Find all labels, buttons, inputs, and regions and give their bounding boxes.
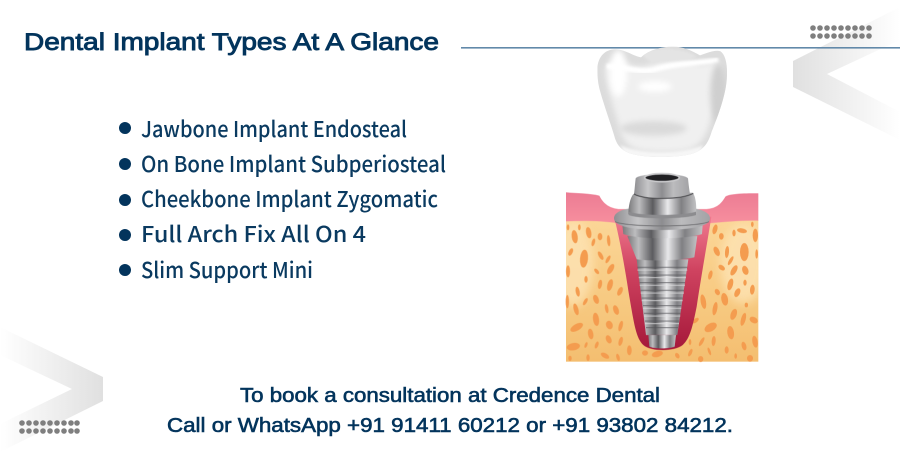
list item 4: Full Arch Fix All On 4 <box>141 217 366 249</box>
decorative chevron: top right <box>793 7 900 140</box>
bone highlights <box>553 220 767 307</box>
list item 5: Slim Support Mini <box>141 253 313 285</box>
dot grid: bottom left <box>19 420 80 434</box>
jawbone block <box>566 220 758 362</box>
implant collar <box>627 236 697 260</box>
implant socket <box>614 217 711 350</box>
call to action <box>167 385 733 437</box>
illustration: dental implant and crown <box>566 46 758 362</box>
implant tip <box>648 335 676 348</box>
implant top post <box>634 174 690 198</box>
phone numbers line: Call or WhatsApp +91 91411 60212 or +91 93802 84212. <box>167 415 733 437</box>
gum tissue <box>566 192 758 223</box>
implant flange disc <box>614 208 710 230</box>
implant upper abutment <box>628 193 696 217</box>
list item 2: On Bone Implant Subperiosteal <box>141 147 446 179</box>
heading rule <box>461 47 900 49</box>
consultation line: To book a consultation at Credence Dental <box>240 385 660 407</box>
list item 1: Jawbone Implant Endosteal <box>141 112 407 144</box>
decorative chevron: bottom left <box>0 327 103 452</box>
bone pores <box>566 222 759 362</box>
dot grid: top right <box>810 25 872 39</box>
list item 3: Cheekbone Implant Zygomatic <box>141 182 438 214</box>
implant screw <box>637 259 688 335</box>
implant lower flange <box>622 225 703 238</box>
implant type list <box>119 112 446 285</box>
implant screw hole <box>645 174 679 182</box>
icon: tooth crown <box>598 46 727 157</box>
title: Dental Implant Types At A Glance <box>24 29 439 56</box>
